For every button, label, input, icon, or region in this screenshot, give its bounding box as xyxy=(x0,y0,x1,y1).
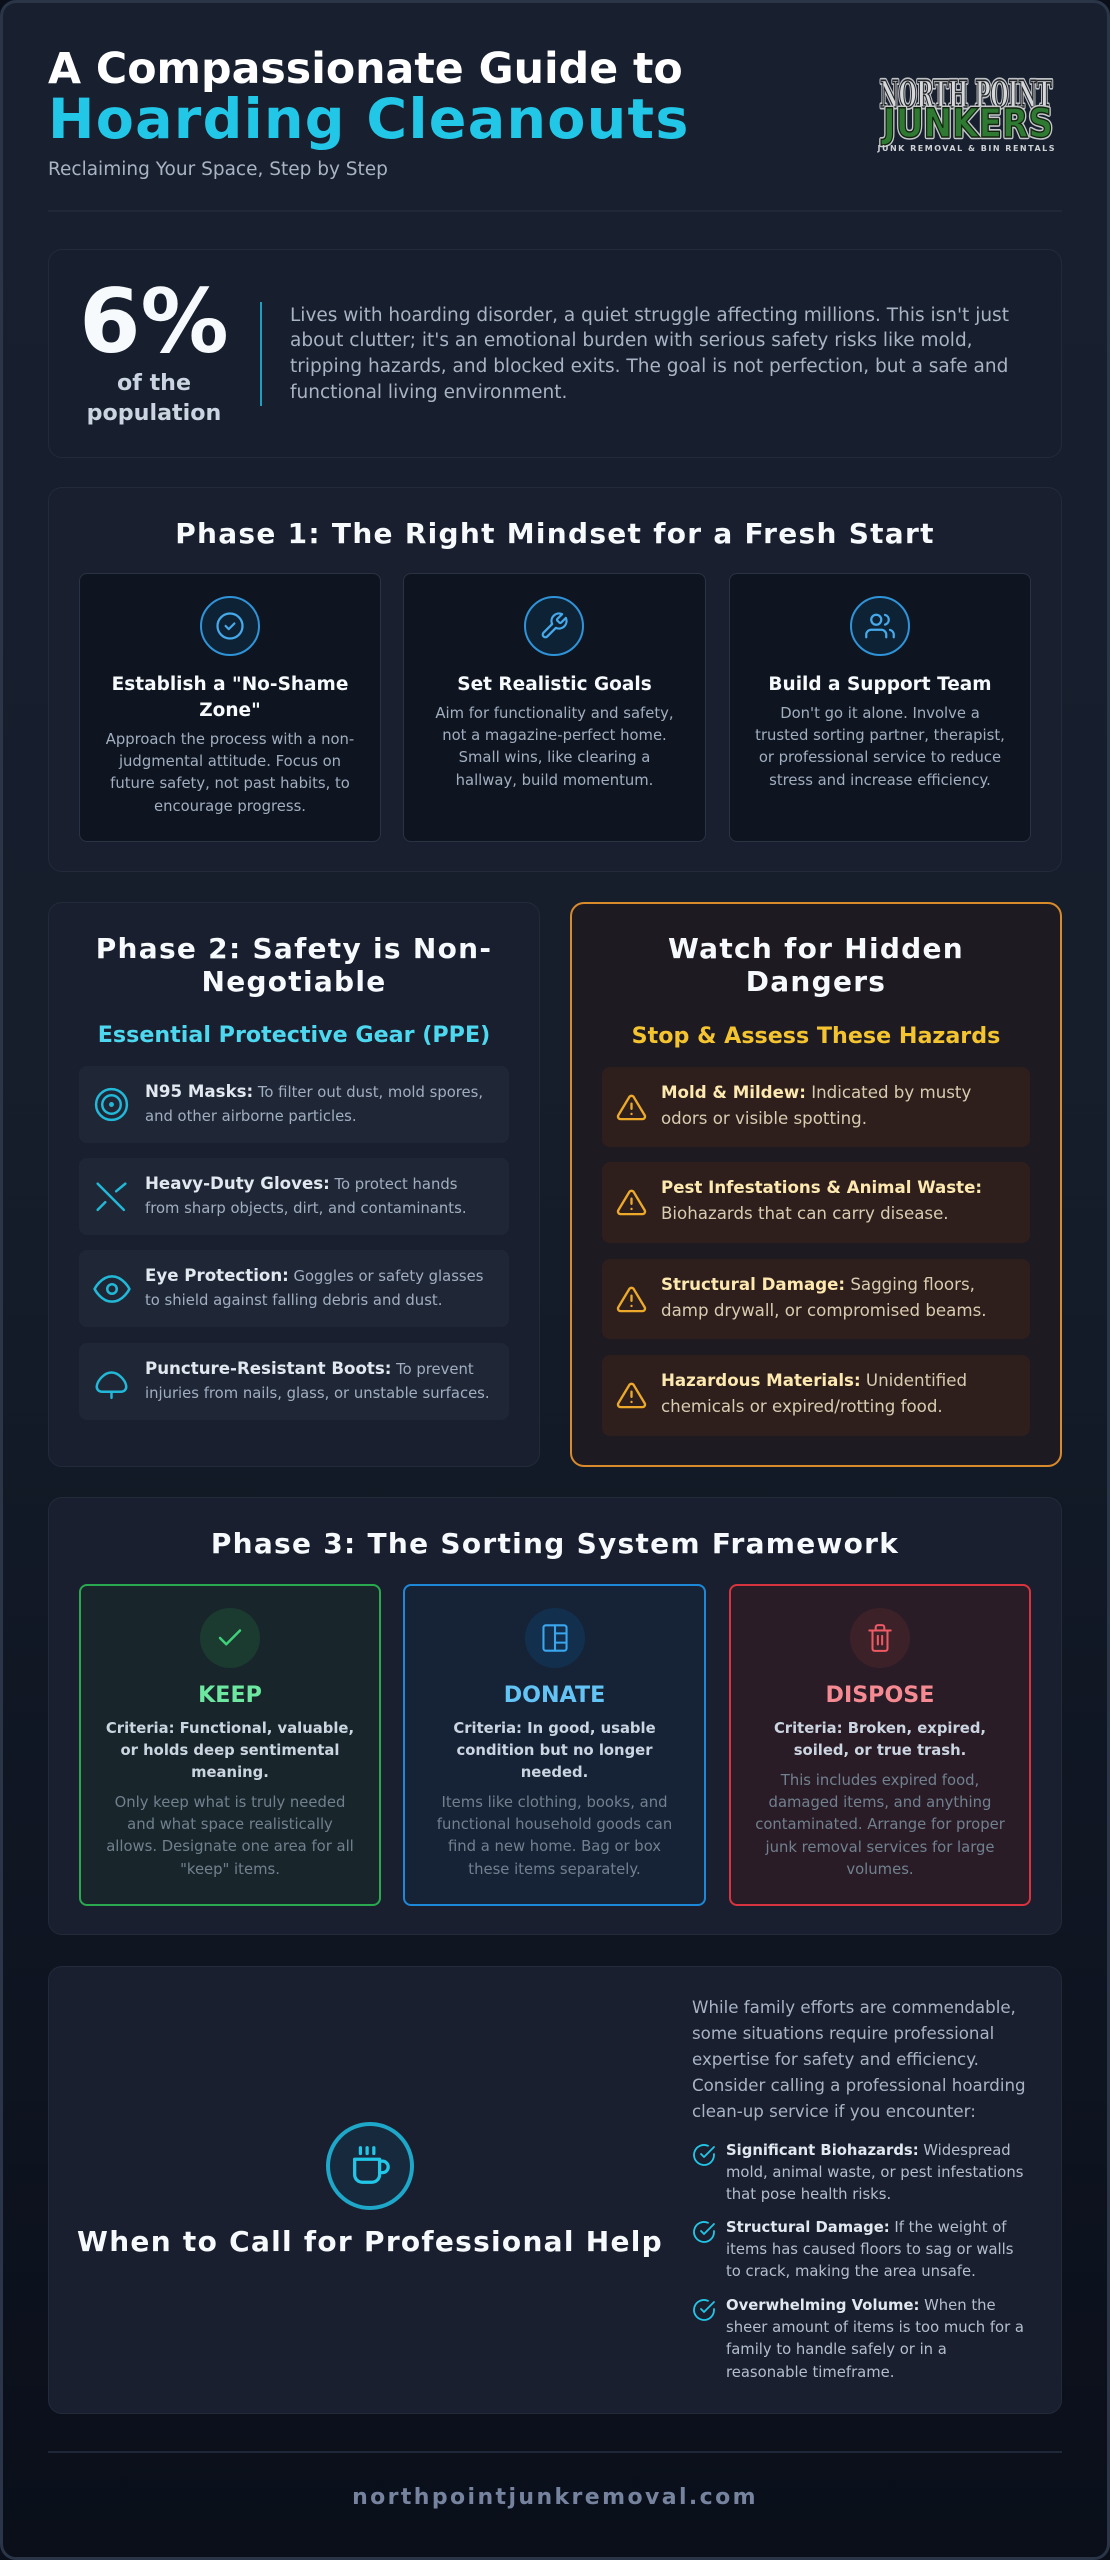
card text: trusted sorting partner, therapist, xyxy=(755,727,1005,744)
card: keep xyxy=(79,1584,381,1906)
logo xyxy=(876,74,1055,153)
card title: Build a Support Team xyxy=(768,674,992,695)
checklist item xyxy=(693,2219,1014,2280)
description: and what space realistically xyxy=(127,1816,333,1833)
item text: family to handle safely or in a xyxy=(726,2341,947,2358)
subtitle: Reclaiming Your Space, Step by Step xyxy=(48,159,388,180)
icon: boot xyxy=(96,1371,128,1400)
icon: warning xyxy=(616,1094,646,1120)
item text xyxy=(145,1266,483,1309)
header divider xyxy=(48,210,1062,212)
stat caption xyxy=(87,370,221,426)
heading: Phase 1: The Right Mindset for a Fresh Start xyxy=(175,517,935,550)
stat caption: of the xyxy=(117,370,191,396)
icon: warning xyxy=(616,1190,646,1216)
card label: DONATE xyxy=(504,1682,605,1708)
description xyxy=(437,1794,672,1878)
criteria xyxy=(453,1720,656,1781)
item text: Heavy-Duty Gloves: To protect hands xyxy=(145,1174,457,1193)
item: boots xyxy=(79,1343,509,1420)
description: volumes. xyxy=(846,1861,914,1878)
item text: Puncture-Resistant Boots: To prevent xyxy=(145,1359,474,1378)
heading: Negotiable xyxy=(201,964,386,998)
item text: to shield against falling debris and dust. xyxy=(145,1292,442,1309)
description: "keep" items. xyxy=(180,1861,280,1878)
footer divider xyxy=(48,2451,1062,2453)
subheading: Stop & Assess These Hazards xyxy=(632,1023,1000,1049)
card label: DISPOSE xyxy=(826,1682,934,1708)
item text: from sharp objects, dirt, and contaminants. xyxy=(145,1200,467,1217)
heading: Watch for Hidden xyxy=(668,932,964,964)
item text: that pose health risks. xyxy=(726,2186,891,2203)
panel: hidden dangers xyxy=(570,902,1062,1467)
item text: N95 Masks: To filter out dust, mold spores, xyxy=(145,1082,483,1101)
subheading: Essential Protective Gear (PPE) xyxy=(98,1022,490,1048)
heading: Phase 2: Safety is Non- xyxy=(96,932,492,964)
criteria xyxy=(106,1720,354,1781)
card text: Don't go it alone. Involve a xyxy=(780,705,980,722)
panel: phase 1 xyxy=(48,487,1062,872)
card text: Approach the process with a non- xyxy=(106,731,354,748)
icon: warning xyxy=(616,1382,646,1408)
description: functional household goods can xyxy=(437,1816,672,1833)
panel: statistic xyxy=(48,249,1062,458)
item text: Eye Protection: Goggles or safety glasses xyxy=(145,1266,483,1285)
card text: stress and increase efficiency. xyxy=(769,772,991,789)
footer url: northpointjunkremoval.com xyxy=(352,2485,758,2510)
card text: Small wins, like clearing a xyxy=(459,749,650,766)
intro text: While family efforts are commendable, xyxy=(692,1998,1016,2017)
icon: target mask xyxy=(94,1088,128,1122)
item text: Hazardous Materials: Unidentified xyxy=(661,1371,967,1390)
card: realistic goals xyxy=(403,573,706,842)
card text: not a magazine-perfect home. xyxy=(442,727,667,744)
title xyxy=(48,44,690,152)
item: eye protection xyxy=(79,1250,509,1327)
criteria: Criteria: Broken, expired, xyxy=(774,1720,986,1737)
stat description: tripping hazards, and blocked exits. The goal is not perfection, but a safe and xyxy=(290,356,1008,377)
item text: injuries from nails, glass, or unstable surfaces. xyxy=(145,1385,490,1402)
card text: or professional service to reduce xyxy=(759,749,1001,766)
stat description: Lives with hoarding disorder, a quiet struggle affecting millions. This isn't just xyxy=(290,304,1009,326)
item text xyxy=(661,1371,967,1416)
description: Only keep what is truly needed xyxy=(115,1794,345,1811)
title: A Compassionate Guide to xyxy=(48,44,683,94)
card text: hallway, build momentum. xyxy=(456,772,653,789)
card text xyxy=(755,705,1005,789)
card text: encourage progress. xyxy=(154,798,306,815)
item text: Structural Damage: Sagging floors, xyxy=(661,1275,975,1294)
card text xyxy=(435,705,674,789)
item text xyxy=(145,1082,483,1125)
stat description: about clutter; it's an emotional burden with serious safety risks like mold, xyxy=(290,330,973,351)
item text xyxy=(726,2142,1023,2203)
item text: Mold & Mildew: Indicated by musty xyxy=(661,1083,971,1102)
description: This includes expired food, xyxy=(781,1772,979,1789)
intro text: expertise for safety and efficiency. xyxy=(692,2050,979,2069)
intro text: clean-up service if you encounter: xyxy=(692,2102,976,2121)
description: find a new home. Bag or box xyxy=(448,1838,661,1855)
panel: phase 3 xyxy=(48,1497,1062,1935)
item text: Overwhelming Volume: When the xyxy=(726,2297,996,2314)
item: mold xyxy=(602,1067,1030,1147)
item text xyxy=(726,2219,1014,2280)
item: hazmat xyxy=(602,1355,1030,1436)
icon: users xyxy=(850,596,910,656)
heading: Dangers xyxy=(746,964,886,998)
criteria: condition but no longer xyxy=(456,1742,653,1759)
icon: check badge xyxy=(693,2221,715,2243)
description: contaminated. Arrange for proper xyxy=(755,1816,1005,1833)
title: Hoarding Cleanouts xyxy=(48,87,690,152)
card: no-shame zone xyxy=(79,573,381,842)
description: Items like clothing, books, and xyxy=(442,1794,667,1811)
heading: Phase 3: The Sorting System Framework xyxy=(211,1527,899,1560)
big number: 6% xyxy=(79,270,229,373)
icon: crossed lines xyxy=(96,1182,127,1212)
description: these items separately. xyxy=(468,1861,641,1878)
card title xyxy=(112,674,348,721)
item text: Structural Damage: If the weight of xyxy=(726,2219,1006,2236)
item text xyxy=(661,1083,971,1128)
card text: Aim for functionality and safety, xyxy=(435,705,674,722)
item text: and other airborne particles. xyxy=(145,1108,357,1125)
item: N95 masks xyxy=(79,1066,509,1143)
item text xyxy=(726,2295,1024,2384)
item text: Biohazards that can carry disease. xyxy=(661,1204,949,1223)
item text: Pest Infestations & Animal Waste: xyxy=(661,1178,982,1197)
card text: future safety, not past habits, to xyxy=(110,775,350,792)
stat description: functional living environment. xyxy=(290,382,567,403)
item text: Significant Biohazards: Widespread xyxy=(726,2142,1011,2159)
checklist item xyxy=(693,2142,1023,2203)
heading: When to Call for Professional Help xyxy=(77,2224,663,2258)
criteria: soiled, or true trash. xyxy=(794,1742,966,1759)
icon: trash xyxy=(850,1608,910,1668)
item text xyxy=(661,1178,982,1223)
description xyxy=(755,1772,1005,1878)
icon: check circle xyxy=(200,596,260,656)
card text: judgmental attitude. Focus on xyxy=(119,753,341,770)
icon: check badge xyxy=(692,2298,716,2322)
card label: KEEP xyxy=(198,1682,262,1708)
icon: warning xyxy=(616,1286,646,1312)
item: gloves xyxy=(79,1158,509,1235)
card title: Establish a "No-Shame xyxy=(112,674,348,695)
panel: phase 2 safety xyxy=(48,902,540,1467)
description: damaged items, and anything xyxy=(769,1794,991,1811)
checklist item xyxy=(693,2297,1024,2381)
item: structural xyxy=(602,1259,1030,1339)
criteria: or holds deep sentimental xyxy=(120,1742,339,1759)
intro text xyxy=(692,1998,1026,2121)
stat caption: population xyxy=(87,400,221,426)
criteria: needed. xyxy=(521,1764,588,1781)
description: allows. Designate one area for all xyxy=(106,1838,354,1855)
card title: Zone" xyxy=(199,700,261,721)
criteria: Criteria: Functional, valuable, xyxy=(106,1720,354,1737)
item text: to crack, making the area unsafe. xyxy=(726,2263,976,2280)
icon: eye xyxy=(93,1275,131,1303)
item text: chemicals or expired/rotting food. xyxy=(661,1397,943,1416)
criteria: meaning. xyxy=(191,1764,269,1781)
card text xyxy=(106,731,354,815)
intro text: Consider calling a professional hoarding xyxy=(692,2076,1026,2095)
icon: coffee cup badge xyxy=(326,2122,414,2210)
card: dispose xyxy=(729,1584,1031,1906)
item text: items has caused floors to sag or walls xyxy=(726,2241,1014,2258)
item text xyxy=(661,1275,987,1320)
card title: Set Realistic Goals xyxy=(457,674,652,695)
icon: check xyxy=(200,1608,260,1668)
icon: box xyxy=(525,1608,585,1668)
item text: mold, animal waste, or pest infestations xyxy=(726,2164,1023,2181)
heading xyxy=(668,932,964,998)
icon: check badge xyxy=(693,2144,715,2166)
logo: JUNK REMOVAL & BIN RENTALS xyxy=(876,144,1055,153)
card: support team xyxy=(729,573,1031,842)
panel: professional help xyxy=(48,1966,1062,2414)
item text: odors or visible spotting. xyxy=(661,1109,867,1128)
heading xyxy=(96,932,492,998)
stat description xyxy=(290,304,1009,403)
item text xyxy=(145,1174,467,1217)
item text xyxy=(145,1359,490,1402)
stat divider xyxy=(260,302,262,406)
item text: reasonable timeframe. xyxy=(726,2364,894,2381)
icon: wrench xyxy=(524,596,584,656)
description: junk removal services for large xyxy=(765,1839,995,1856)
criteria: Criteria: In good, usable xyxy=(453,1720,656,1737)
item: pests xyxy=(602,1162,1030,1243)
intro text: some situations require professional xyxy=(692,2024,994,2043)
card: donate xyxy=(403,1584,706,1906)
item text: damp drywall, or compromised beams. xyxy=(661,1301,987,1320)
criteria xyxy=(774,1720,986,1759)
description xyxy=(106,1794,354,1878)
item text: sheer amount of items is too much for a xyxy=(726,2319,1024,2336)
